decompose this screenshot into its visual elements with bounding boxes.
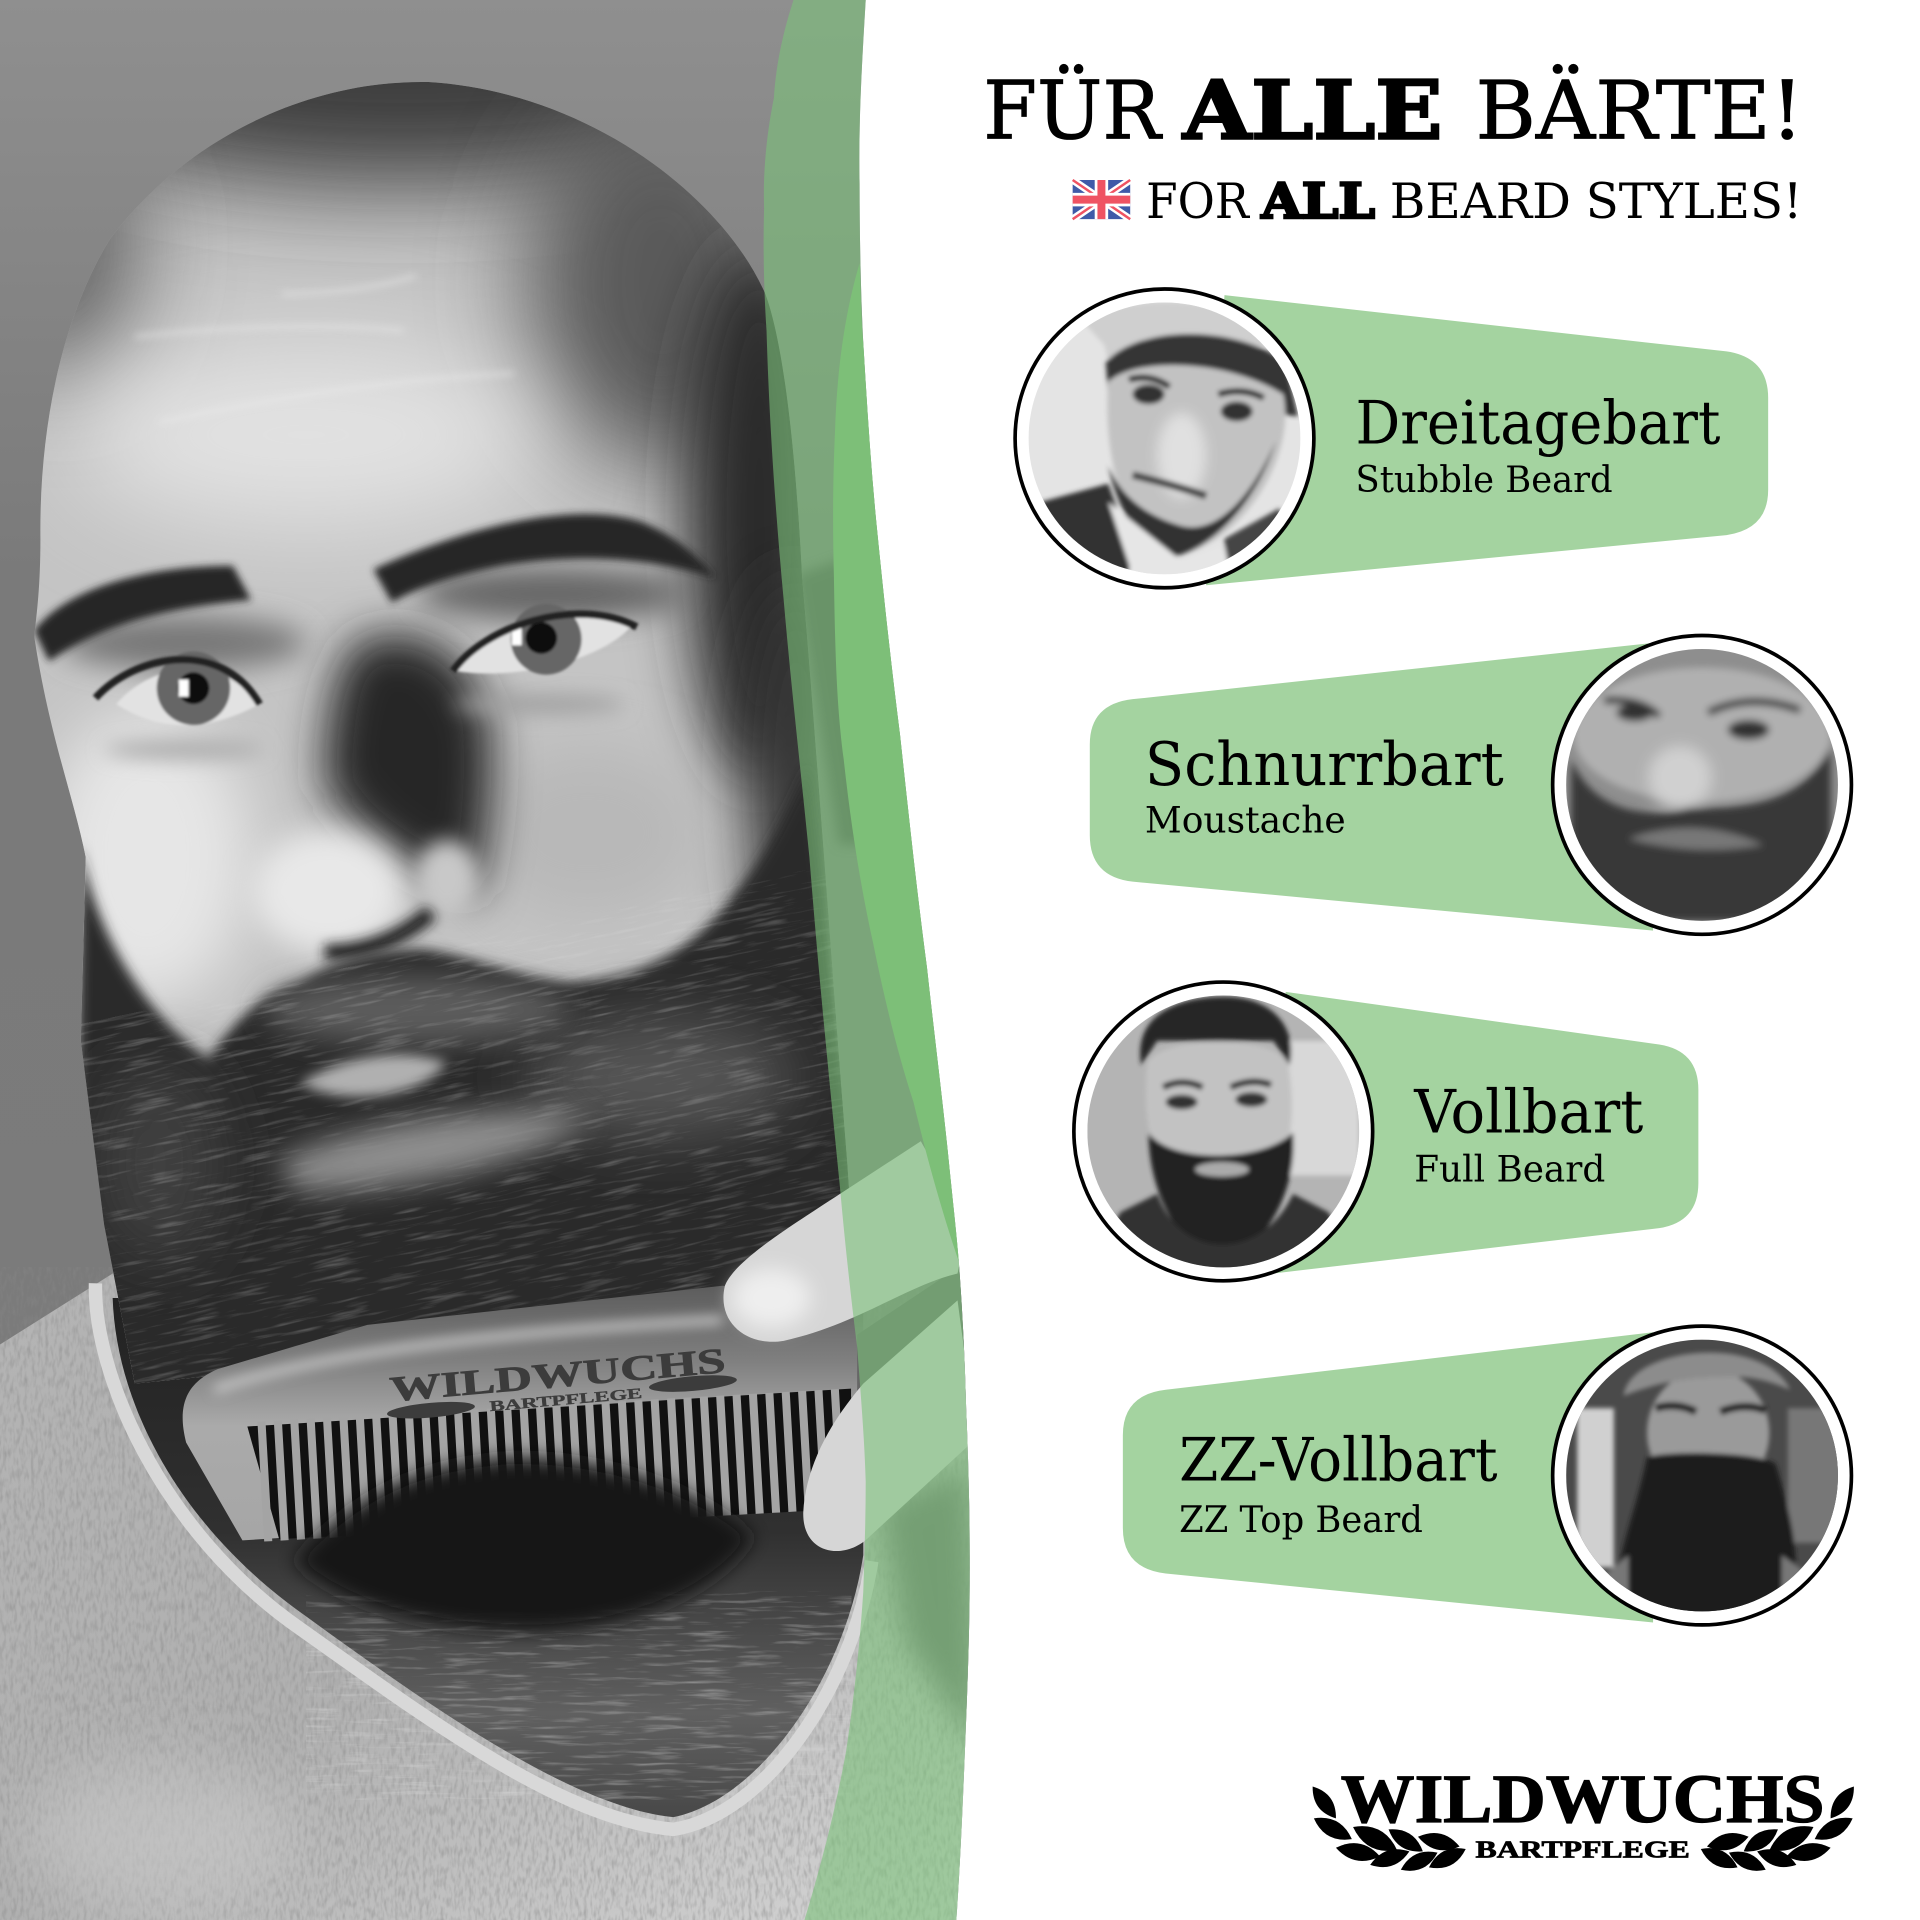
portrait: full beard xyxy=(1087,996,1359,1273)
logo: Wildwuchs Bartpflege xyxy=(1307,1761,1860,1877)
panel: Schnurrbart xyxy=(1090,636,1851,934)
label: Vollbart xyxy=(1413,1078,1643,1148)
label xyxy=(1145,730,1504,842)
subtitle xyxy=(1146,172,1802,230)
label: Moustache xyxy=(1145,799,1346,842)
translucent green wave xyxy=(764,0,970,1920)
comb engraving: logo xyxy=(387,1349,737,1418)
wooden comb xyxy=(183,1286,863,1631)
comb body xyxy=(183,1286,863,1540)
eye socket shadows xyxy=(61,616,306,670)
forehead wrinkles xyxy=(136,276,512,376)
nose shadow xyxy=(324,635,491,900)
comb highlight xyxy=(214,1320,722,1390)
icon: left laurel xyxy=(1307,1782,1469,1877)
label: ZZ Top Beard xyxy=(1179,1498,1423,1541)
left eyebrow xyxy=(34,566,251,661)
portrait ring xyxy=(1553,636,1851,934)
grey sweater xyxy=(0,1267,980,1920)
logo wordmark: WILDWUCHS xyxy=(1341,1761,1824,1837)
title: ALLE xyxy=(1182,63,1442,158)
comb engraving: logo: WILDWUCHS xyxy=(388,1340,727,1409)
comb engraving: logo: BARTPFLEGE xyxy=(489,1386,643,1415)
panel shape xyxy=(1206,295,1768,585)
right eyebrow xyxy=(373,514,716,602)
icon: right laurel xyxy=(1697,1782,1860,1877)
label: ZZ-Vollbart xyxy=(1179,1425,1498,1495)
label xyxy=(1413,1078,1643,1191)
hand: shadow between fingers xyxy=(857,1261,967,1445)
logo subline: BARTPFLEGE xyxy=(1476,1837,1690,1864)
subtitle: STYLES! xyxy=(1586,173,1802,230)
portrait ring xyxy=(1074,982,1373,1281)
panel: Dreitagebart xyxy=(1015,289,1768,588)
wall behind the man xyxy=(0,0,980,1920)
chin patch xyxy=(276,1112,588,1190)
lips xyxy=(300,1055,447,1097)
title: FÜR xyxy=(983,63,1163,158)
panel: Vollbart xyxy=(1074,982,1698,1281)
left eye xyxy=(96,651,260,725)
right eye xyxy=(453,604,637,675)
portrait ring xyxy=(1553,1326,1851,1625)
portrait: stubble beard xyxy=(1029,302,1300,582)
subtitle: BEARD xyxy=(1390,173,1571,230)
subtitle: FOR xyxy=(1146,173,1251,230)
label: Schnurrbart xyxy=(1145,730,1504,800)
solid green wave xyxy=(833,263,959,1261)
bald head and face xyxy=(34,82,849,1384)
portrait: ZZ Top beard xyxy=(1566,1340,1843,1616)
label: Full Beard xyxy=(1414,1148,1605,1191)
title: BÄRTE! xyxy=(1476,63,1804,158)
panel: ZZ-Vollbart xyxy=(1123,1326,1851,1625)
full beard xyxy=(80,780,849,1384)
panel shape xyxy=(1123,1332,1653,1622)
curly hair over teeth xyxy=(294,1457,753,1631)
panel shape xyxy=(1273,992,1698,1273)
label xyxy=(1356,388,1720,501)
hand: upper finger xyxy=(723,1141,967,1342)
portrait: moustache xyxy=(1566,649,1838,921)
hand: lower finger xyxy=(803,1300,976,1551)
label: Stubble Beard xyxy=(1356,458,1613,501)
sweater collar xyxy=(95,1283,872,1829)
panel shape xyxy=(1090,643,1653,931)
subtitle: ALL xyxy=(1260,172,1375,230)
icon: UK flag xyxy=(1073,180,1130,219)
label xyxy=(1179,1425,1498,1541)
hairy neck xyxy=(113,1298,863,1817)
comb teeth xyxy=(247,1389,851,1539)
wall shadows near the hand xyxy=(802,562,854,845)
title xyxy=(983,63,1804,158)
portrait ring xyxy=(1015,289,1314,588)
nose xyxy=(252,830,404,953)
label: Dreitagebart xyxy=(1356,388,1720,458)
photo: bearded man holding a wooden comb xyxy=(0,0,1026,1920)
